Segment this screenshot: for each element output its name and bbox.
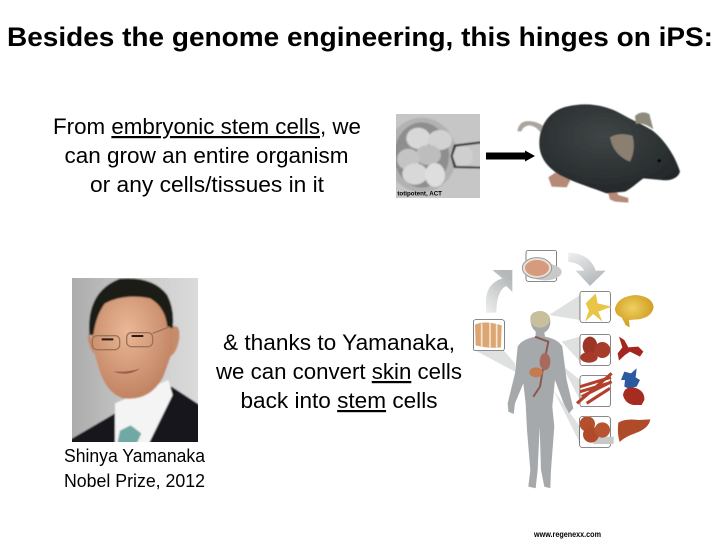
mouse body xyxy=(539,104,680,193)
mouse feet xyxy=(548,172,628,203)
image: black mouse xyxy=(517,104,680,203)
neck and face xyxy=(91,286,173,399)
source credit: www.regenexx.com xyxy=(533,530,601,539)
mouse tail xyxy=(517,121,543,133)
icon: liver xyxy=(618,419,650,442)
arrow: curve down to tissues xyxy=(568,253,606,286)
tile: muscle fibres xyxy=(577,373,612,407)
text block: embryonic stem cells: can grow an entire organism xyxy=(64,143,349,168)
projection beams xyxy=(474,295,580,443)
text block: embryonic stem cells xyxy=(53,114,361,197)
caption: Shinya Yamanaka xyxy=(64,445,206,491)
arrow: embryo to mouse xyxy=(486,150,535,162)
diagram: iPS cycle and human body xyxy=(473,250,654,488)
mouth xyxy=(113,369,140,374)
tile: skin cells xyxy=(473,320,504,351)
text block: embryonic stem cells: From embryonic stem cells, we xyxy=(53,114,361,139)
human body xyxy=(508,311,573,488)
text block: Yamanaka conversion: & thanks to Yamanaka, xyxy=(223,330,455,355)
glasses xyxy=(92,327,170,350)
tile: neurons xyxy=(580,291,612,322)
arrow: up-curve from skin cells xyxy=(486,270,512,313)
icon: pancreas xyxy=(618,337,643,361)
collar xyxy=(115,380,173,447)
text block: embryonic stem cells: or any cells/tissues in it xyxy=(90,172,324,197)
icon: heart xyxy=(621,368,644,405)
image: portrait of Shinya Yamanaka xyxy=(72,278,198,442)
text block: Yamanaka conversion: we can convert skin cells xyxy=(215,359,462,384)
tile: culture dish xyxy=(522,250,562,281)
image: embryo micrograph xyxy=(396,114,480,198)
icon: brain xyxy=(615,295,654,327)
caption: Shinya Yamanaka: Shinya Yamanaka xyxy=(64,445,206,466)
mouse ears xyxy=(610,134,634,162)
text block: Yamanaka conversion: back into stem cells xyxy=(240,388,438,413)
title: Besides the genome engineering, this hinges on iPS: xyxy=(7,22,713,52)
text block: Yamanaka conversion xyxy=(215,330,462,413)
image: embryo micrograph: totipotent, ACT xyxy=(397,191,442,197)
tile: pancreatic cells xyxy=(580,334,610,365)
tie xyxy=(116,424,142,442)
ears xyxy=(88,326,179,357)
hair xyxy=(89,278,173,335)
suit xyxy=(72,386,198,442)
tile: liver cells xyxy=(580,416,614,447)
caption: Shinya Yamanaka: Nobel Prize, 2012 xyxy=(64,470,205,491)
